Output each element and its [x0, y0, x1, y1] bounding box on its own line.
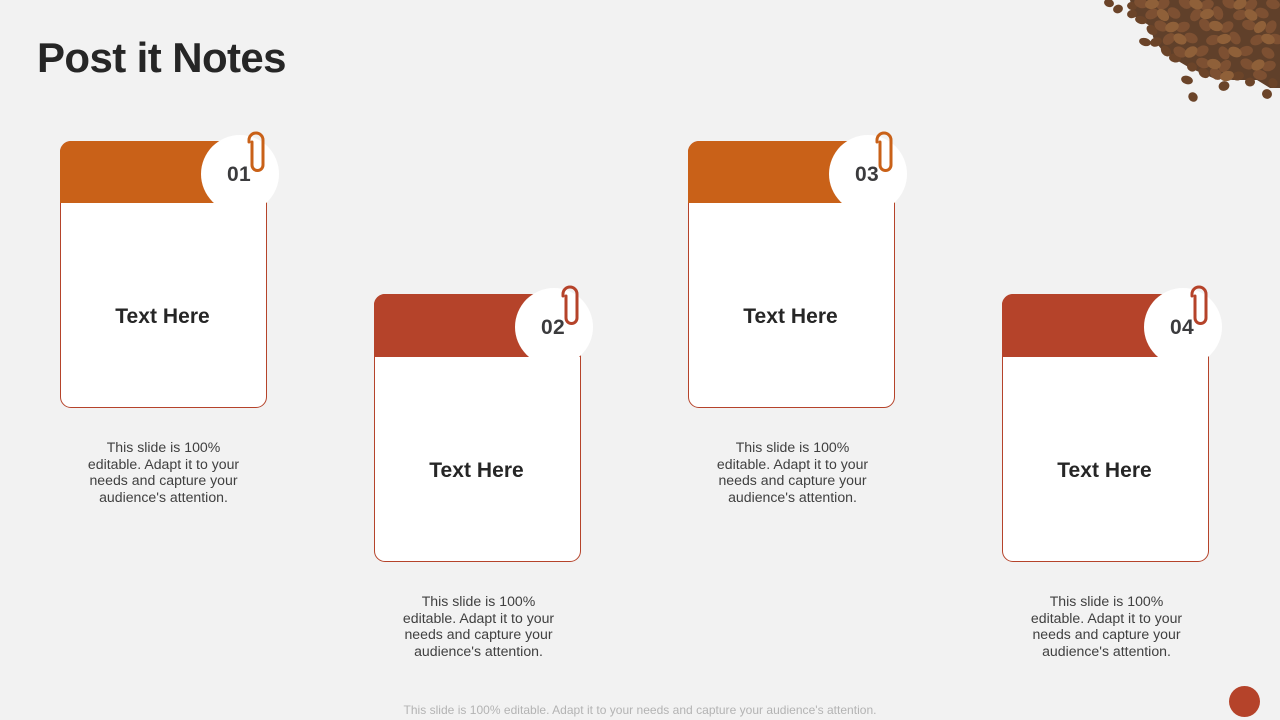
card 3 label: Text Here: [743, 305, 838, 328]
card 4: 04: [1170, 316, 1194, 339]
card 4 description: This slide is 100% editable. Adapt it to your needs and capture your audience's attention.: [1031, 593, 1182, 659]
card 1: [60, 135, 279, 408]
title: Post it Notes: [37, 34, 286, 81]
card 3: [688, 135, 907, 408]
card 1 label: Text Here: [115, 305, 210, 328]
card 1: 01: [227, 163, 251, 186]
coffee beans image: [1104, 0, 1280, 102]
card 1 description: This slide is 100% editable. Adapt it to your needs and capture your audience's attention.: [88, 439, 239, 505]
card 4: [1002, 288, 1222, 562]
card 2 label: Text Here: [429, 459, 524, 482]
card 4 label: Text Here: [1057, 459, 1152, 482]
card 2: 02: [541, 316, 565, 339]
page marker dot: [1229, 686, 1260, 717]
card 2: [374, 288, 593, 562]
card 2 description: This slide is 100% editable. Adapt it to your needs and capture your audience's attention.: [403, 593, 554, 659]
card 3: 03: [855, 163, 879, 186]
card 3 description: This slide is 100% editable. Adapt it to your needs and capture your audience's attention.: [717, 439, 868, 505]
footer note: This slide is 100% editable. Adapt it to your needs and capture your audience's attention.: [403, 703, 877, 717]
